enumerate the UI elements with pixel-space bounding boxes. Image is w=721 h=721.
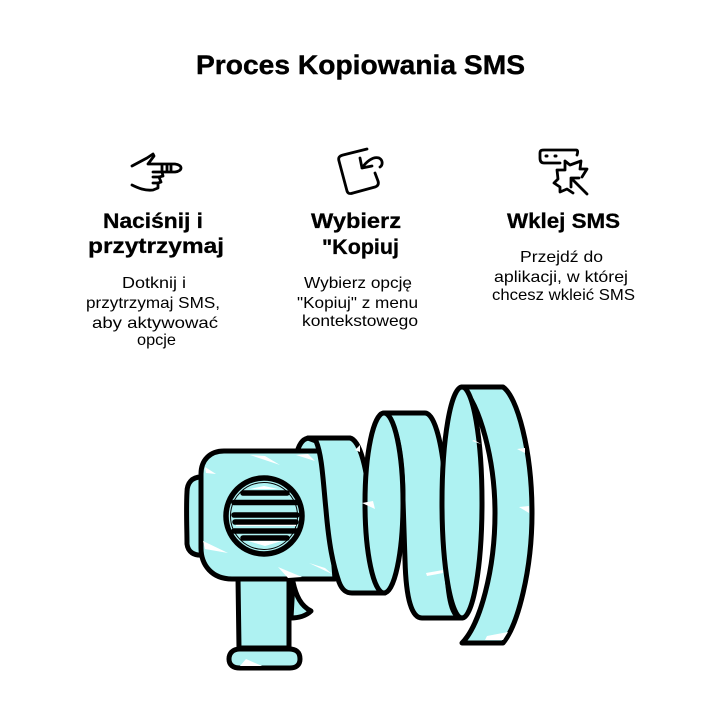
text: step 2 description: "Kopiuj" z menu bbox=[297, 295, 418, 312]
heading: step 2: Wybierz bbox=[311, 210, 401, 233]
panel: step 2 choose copy bbox=[297, 149, 418, 330]
text: step 3 description: chcesz wkleić SMS bbox=[492, 287, 635, 304]
heading: step 1 bbox=[88, 210, 224, 258]
icon: pointing hand bbox=[132, 154, 181, 190]
rear knob bbox=[187, 477, 203, 555]
icon: document with back arrow bbox=[339, 149, 382, 194]
title: Proces Kopiowania SMS bbox=[196, 50, 525, 80]
ribbon second band bbox=[385, 413, 462, 618]
panel: step 1 press and hold bbox=[86, 154, 224, 349]
text: step 1 description: Dotknij i bbox=[122, 275, 186, 292]
text: step 2 description: kontekstowego bbox=[302, 313, 418, 330]
ribbon first ring bbox=[365, 413, 403, 593]
trigger bbox=[291, 582, 311, 618]
vent grille bbox=[226, 478, 302, 554]
ribbon first band bbox=[308, 438, 385, 593]
text: step 2 description bbox=[297, 275, 418, 330]
ribbon last ring bbox=[442, 387, 482, 618]
panel: step 3 paste bbox=[492, 150, 635, 304]
text: step 1 description: aby aktywować bbox=[92, 315, 218, 332]
text: step 2 description: Wybierz opcję bbox=[304, 275, 412, 292]
text: step 1 description bbox=[86, 275, 220, 349]
heading: step 1: Naciśnij i bbox=[103, 210, 203, 233]
icon: window with click burst bbox=[540, 150, 587, 194]
heading: step 2: "Kopiuj bbox=[322, 236, 399, 259]
text: step 1 description: przytrzymaj SMS, bbox=[86, 295, 220, 312]
text: step 1 description: opcje bbox=[137, 332, 176, 349]
ribbon back loop bbox=[297, 438, 320, 455]
handle bbox=[238, 578, 289, 648]
heading: step 2 bbox=[311, 210, 401, 259]
illustration: hair dryer with spiral ribbon bbox=[187, 387, 532, 668]
heading: step 3: Wklej SMS bbox=[507, 210, 620, 233]
heading: step 1: przytrzymaj bbox=[88, 235, 224, 258]
dryer body bbox=[201, 451, 335, 579]
handle foot bbox=[229, 649, 300, 668]
text: step 3 description: Przejdź do bbox=[520, 249, 603, 266]
text: step 3 description: aplikacji, w której bbox=[494, 269, 628, 286]
sketch highlights bbox=[203, 440, 529, 666]
text: step 3 description bbox=[492, 249, 635, 304]
ribbon third band bbox=[462, 387, 532, 643]
